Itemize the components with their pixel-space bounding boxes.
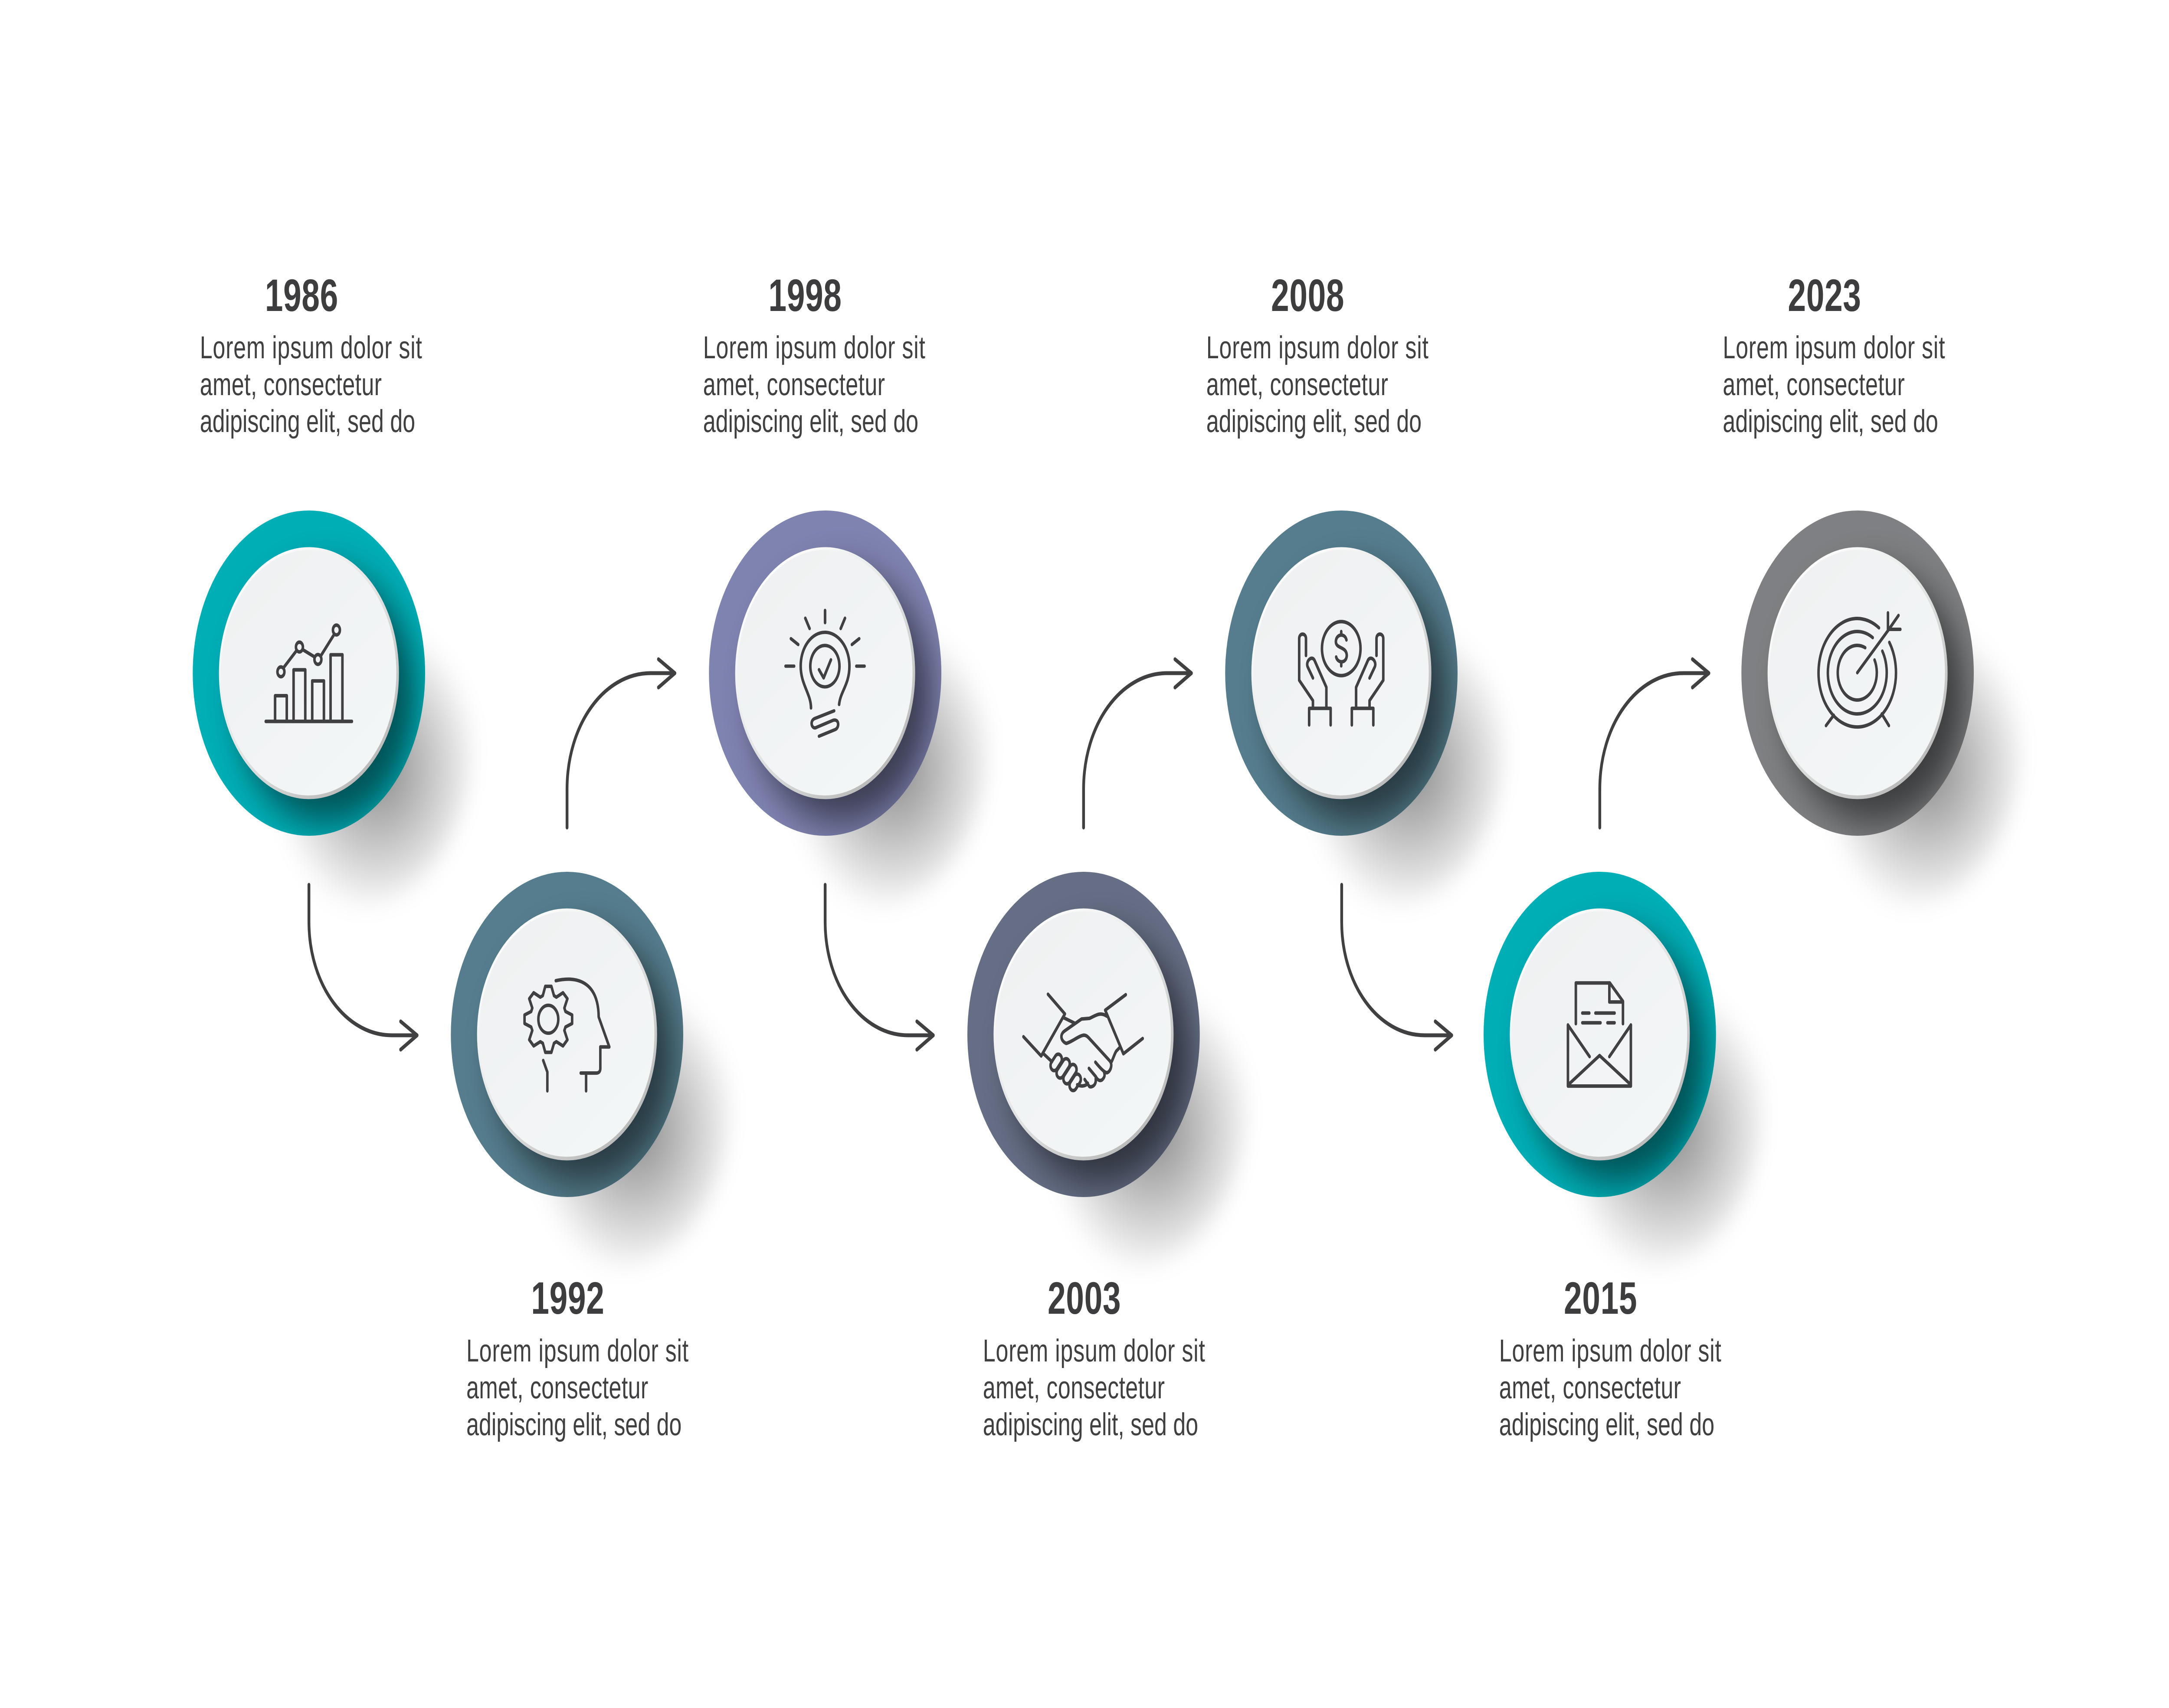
description: 2008: adipiscing elit, sed do: [1206, 404, 1422, 439]
arrow: 1986 to 1992: [309, 885, 417, 1050]
step 6: 2015: [1484, 872, 1765, 1442]
year: 1986: 1986: [265, 270, 338, 321]
description: 2023: amet, consectetur: [1723, 367, 1905, 402]
circle: slate blue: [1225, 510, 1507, 904]
description: 1986: adipiscing elit, sed do: [200, 404, 415, 439]
description: 2015: [1499, 1333, 1721, 1442]
description: 1998: amet, consectetur: [703, 367, 885, 402]
step 3: 1998: [703, 270, 990, 904]
arrow: 1992 to 1998: [567, 659, 675, 828]
icon: head with gear: [524, 979, 609, 1091]
year: 1998: 1998: [768, 270, 842, 321]
description: 2015: amet, consectetur: [1499, 1370, 1681, 1405]
description: 1986: amet, consectetur: [200, 367, 382, 402]
arrow: 2003 to 2008: [1084, 659, 1191, 828]
step 5: 2008: [1206, 270, 1507, 904]
description: 1998: adipiscing elit, sed do: [703, 404, 918, 439]
icon: bar chart with trend line: [266, 625, 352, 721]
description: 1986: [200, 330, 422, 439]
description: 2003: amet, consectetur: [983, 1370, 1165, 1405]
icon: handshake: [1023, 994, 1143, 1093]
description: 2008: amet, consectetur: [1206, 367, 1388, 402]
circle: teal: [193, 510, 474, 904]
step 2: 1992: [451, 872, 732, 1442]
year: 1992: 1992: [531, 1273, 604, 1324]
step 4: 2003: [967, 872, 1249, 1442]
description: 2015: adipiscing elit, sed do: [1499, 1407, 1714, 1442]
year: 2015: 2015: [1564, 1273, 1637, 1324]
description: 2023: [1723, 330, 1945, 439]
icon: open envelope with document: [1568, 983, 1631, 1086]
description: 1998: [703, 330, 925, 439]
description: 1992: Lorem ipsum dolor sit: [466, 1333, 688, 1368]
circle: periwinkle: [709, 510, 990, 904]
description: 2023: adipiscing elit, sed do: [1723, 404, 1938, 439]
step 7: 2023: [1723, 270, 2023, 904]
description: 1998: Lorem ipsum dolor sit: [703, 330, 925, 365]
arrow: 1998 to 2003: [825, 885, 933, 1050]
circle: grey: [1741, 510, 2023, 904]
description: 2003: [983, 1333, 1205, 1442]
description: 1992: adipiscing elit, sed do: [466, 1407, 681, 1442]
year: 2003: 2003: [1048, 1273, 1121, 1324]
step 1: 1986: [193, 270, 474, 904]
icon: hands holding dollar coin: [1299, 622, 1383, 725]
description: 2003: Lorem ipsum dolor sit: [983, 1333, 1205, 1368]
description: 2008: [1206, 330, 1429, 439]
arrow: 2008 to 2015: [1342, 885, 1451, 1050]
description: 2003: adipiscing elit, sed do: [983, 1407, 1198, 1442]
circle: dark slate: [967, 872, 1249, 1266]
circle: slate blue: [451, 872, 732, 1266]
arrow: 2015 to 2023: [1600, 659, 1709, 828]
description: 2023: Lorem ipsum dolor sit: [1723, 330, 1945, 365]
icon: target with arrow: [1818, 613, 1900, 727]
description: 2015: Lorem ipsum dolor sit: [1499, 1333, 1721, 1368]
icon: light bulb with check: [786, 610, 865, 736]
description: 1992: amet, consectetur: [466, 1370, 648, 1405]
year: 2008: 2008: [1271, 270, 1344, 321]
description: 1992: [466, 1333, 688, 1442]
description: 1986: Lorem ipsum dolor sit: [200, 330, 422, 365]
year: 2023: 2023: [1788, 270, 1861, 321]
circle: teal: [1484, 872, 1765, 1266]
description: 2008: Lorem ipsum dolor sit: [1206, 330, 1429, 365]
